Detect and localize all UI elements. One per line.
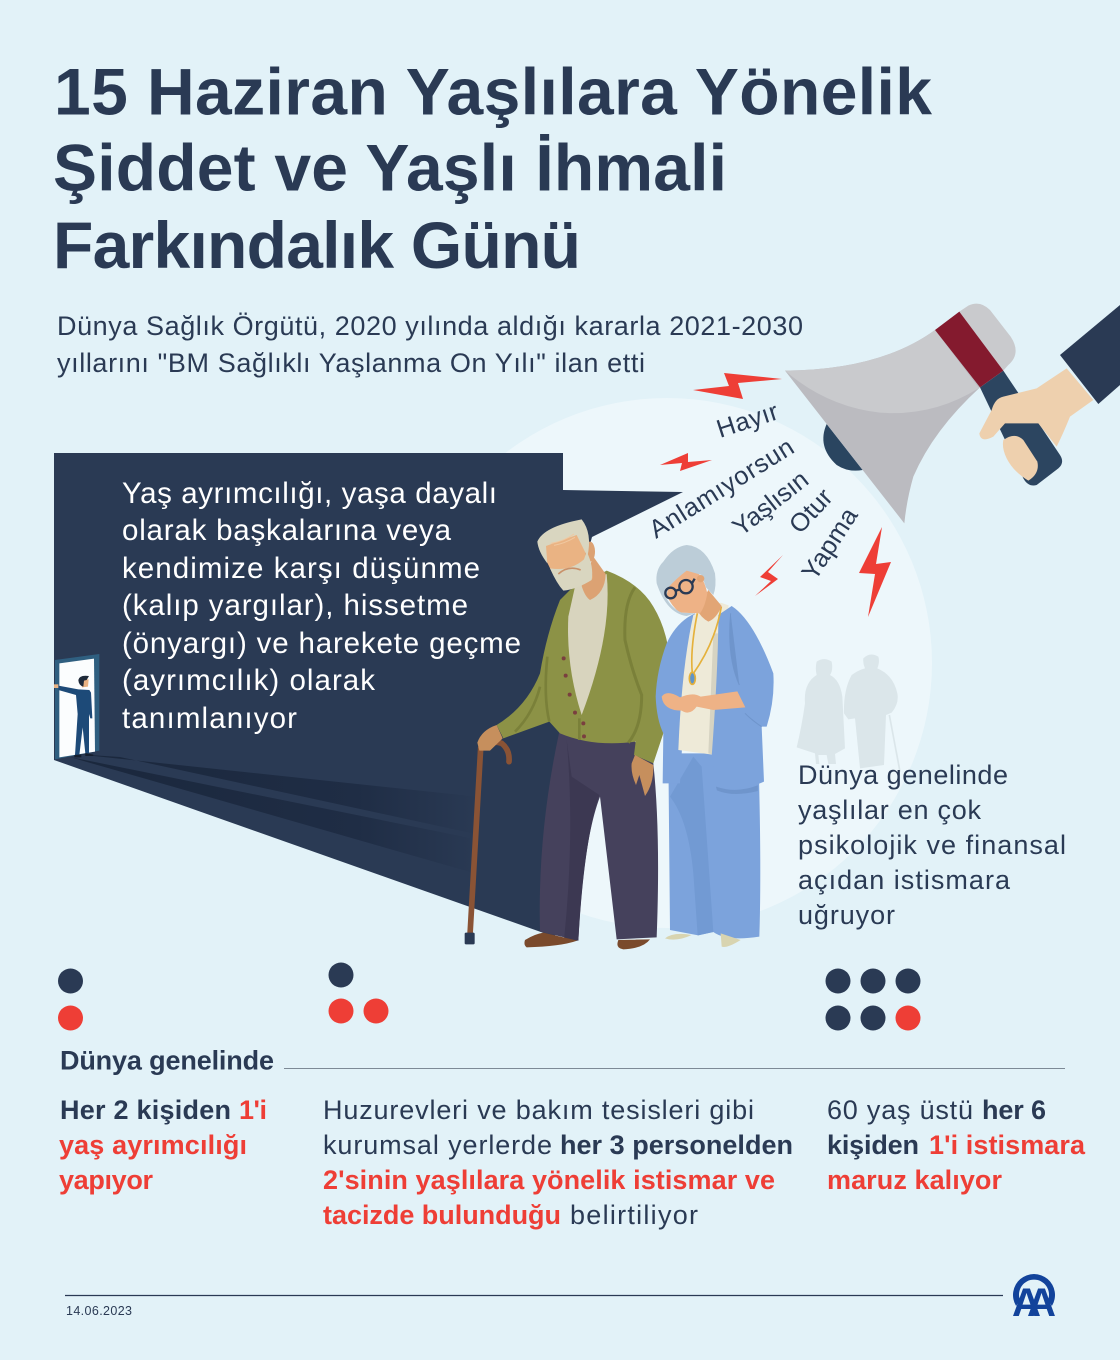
title: 15 Haziran Yaşlılara Yönelik xyxy=(54,54,932,128)
ear xyxy=(585,542,595,562)
sleeve xyxy=(1060,305,1120,404)
footer rule xyxy=(65,1294,1003,1296)
buttons xyxy=(562,656,586,738)
right side statement: açıdan istismara xyxy=(798,865,1011,895)
shirt xyxy=(568,574,608,715)
hand xyxy=(979,368,1093,447)
lightning bolts xyxy=(660,373,891,617)
shouted words: Yapma xyxy=(797,502,864,585)
column 1 text: 1'i xyxy=(239,1095,267,1125)
megaphone and hand xyxy=(785,304,1120,523)
column 3 text: her 6 xyxy=(982,1095,1046,1125)
hands xyxy=(477,725,653,796)
subtitle xyxy=(57,311,803,378)
dots: 1 of 2 xyxy=(58,968,83,1030)
section heading: Dünya genelinde xyxy=(60,1046,274,1076)
silhouettes of elderly couple xyxy=(797,655,900,772)
shouted words xyxy=(644,397,864,585)
trousers xyxy=(540,732,658,941)
agency logo xyxy=(1012,1274,1056,1325)
neck xyxy=(697,590,722,622)
handle xyxy=(980,371,1062,485)
column 3 text: 60 yaş üstü xyxy=(827,1095,973,1125)
shouted words: Anlamıyorsun xyxy=(644,433,799,544)
megaphone rear xyxy=(959,304,1016,371)
illustration: elderly woman xyxy=(656,545,774,947)
speech panel text: Yaş ayrımcılığı, yaşa dayalı xyxy=(122,477,497,510)
column 2 text: 2'sinin yaşlılara yönelik istismar ve xyxy=(323,1165,775,1195)
figure in doorway xyxy=(54,676,93,757)
column 3 text: maruz kalıyor xyxy=(827,1165,1002,1195)
column 2 text xyxy=(323,1095,793,1230)
column 2 text: Huzurevleri ve bakım tesisleri gibi xyxy=(323,1095,754,1125)
right side statement: psikolojik ve finansal xyxy=(798,830,1066,860)
shouted words: Hayır xyxy=(713,397,782,444)
subtitle: Dünya Sağlık Örgütü, 2020 yılında aldığı kararla 2021-2030 xyxy=(57,311,803,341)
face xyxy=(667,568,707,613)
speech panel text: olarak başkalarına veya xyxy=(122,514,452,547)
thumb xyxy=(1003,436,1038,481)
right side statement xyxy=(798,760,1066,930)
illustration: elderly man xyxy=(465,519,667,949)
title xyxy=(53,54,932,282)
left cardigan xyxy=(656,613,695,783)
speech panel text: (önyargı) ve harekete geçme xyxy=(122,627,521,660)
shirt xyxy=(678,603,729,755)
shouted words: Yaşlısın xyxy=(727,465,814,542)
door with figure xyxy=(54,654,99,759)
column 3 text: kişiden xyxy=(827,1130,919,1160)
speech panel text: tanımlanıyor xyxy=(122,702,297,735)
cone xyxy=(785,330,980,523)
column 1 text: yaş ayrımcılığı xyxy=(59,1130,247,1160)
face xyxy=(542,530,593,588)
column 2 text: belirtiliyor xyxy=(570,1200,698,1230)
title: Farkındalık Günü xyxy=(53,208,581,282)
floor shadows xyxy=(70,754,480,872)
cardigan xyxy=(497,571,667,763)
column 1 text: Her 2 kişiden xyxy=(60,1095,231,1125)
pants xyxy=(668,753,760,938)
title: Şiddet ve Yaşlı İhmali xyxy=(53,130,727,204)
arms and hands xyxy=(662,691,745,713)
speech panel text: (kalıp yargılar), hissetme xyxy=(122,589,468,622)
right side statement: Dünya genelinde xyxy=(798,760,1008,790)
column 2 text: kurumsal yerlerde xyxy=(323,1130,552,1160)
speech panel text: (ayrımcılık) olarak xyxy=(122,664,375,697)
megaphone speaker back xyxy=(823,424,863,471)
right side statement: uğruyor xyxy=(798,900,895,930)
cane xyxy=(470,742,509,935)
glasses xyxy=(665,579,695,598)
dark speech panel xyxy=(54,453,683,937)
agency logo: A xyxy=(1027,1281,1056,1325)
shouted words: Otur xyxy=(784,483,839,539)
column 1 text: yapıyor xyxy=(59,1165,153,1195)
right cardigan xyxy=(712,606,774,789)
column 1 text xyxy=(59,1095,267,1195)
neck xyxy=(582,557,606,600)
column 2 text: her 3 personelden xyxy=(560,1130,793,1160)
column 3 text: 1'i istismara xyxy=(929,1130,1086,1160)
red band xyxy=(935,312,1003,387)
light background circle xyxy=(402,398,932,928)
hair xyxy=(656,545,716,616)
necklace xyxy=(689,607,721,684)
beard xyxy=(550,552,592,591)
subtitle: yıllarını "BM Sağlıklı Yaşlanma On Yılı" ilan etti xyxy=(57,348,645,378)
speech panel text xyxy=(122,477,521,735)
column 3 text xyxy=(827,1095,1086,1195)
right side statement: yaşlılar en çok xyxy=(798,795,982,825)
hair xyxy=(537,519,589,563)
shoes xyxy=(665,933,741,947)
agency logo: A xyxy=(1012,1281,1041,1325)
dots: 1 of 6 xyxy=(826,968,920,1030)
date: 14.06.2023 xyxy=(66,1304,132,1318)
cone highlight xyxy=(785,330,979,413)
shoes xyxy=(524,933,650,949)
column 2 text: tacizde bulunduğu xyxy=(323,1200,561,1230)
dots: 2 of 3 xyxy=(328,962,388,1024)
speech panel text: kendimize karşı düşünme xyxy=(122,552,480,585)
